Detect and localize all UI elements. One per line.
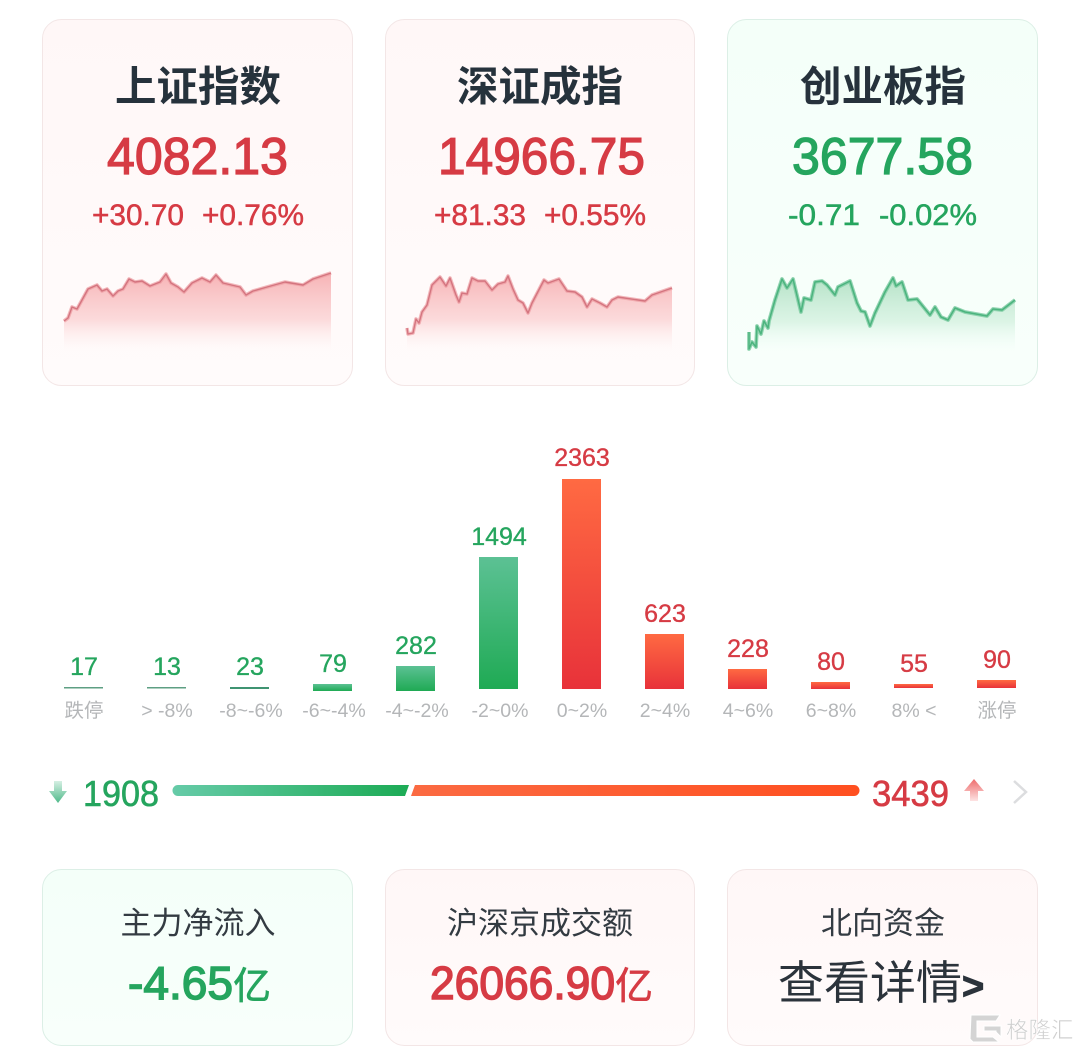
- bar values: 90: [983, 646, 1011, 674]
- panel: 北向资金: [728, 870, 1038, 1046]
- bar labels: -4~-2%: [385, 700, 449, 722]
- heading: 深证成指: 深证成指: [457, 53, 623, 113]
- bar values: 23: [236, 653, 264, 681]
- change: -0.71 -0.02%: -0.71: [788, 199, 860, 232]
- icon: down arrow: [49, 781, 67, 803]
- bar labels: 跌停: [64, 694, 104, 723]
- ratio bar: 跌涨比例: [172, 785, 860, 796]
- bar labels: > -8%: [141, 700, 193, 722]
- value: 3677.58: 3677.58: [792, 128, 973, 186]
- bar values: 17: [70, 653, 98, 681]
- count: 下跌 1908: 1908: [83, 773, 159, 814]
- panel: 深证成指: [386, 20, 694, 386]
- label: 主力净流入: 主力净流入: [120, 898, 276, 943]
- watermark: 格隆汇: [970, 1013, 1074, 1045]
- icon: chevron: [1014, 781, 1026, 803]
- bar labels: 2~4%: [640, 700, 690, 722]
- bar chart: 涨跌分布: [64, 444, 1017, 723]
- change: +81.33 +0.55%: [434, 199, 646, 232]
- bar labels: 4~6%: [723, 700, 773, 722]
- label: 北向资金: 北向资金: [821, 898, 945, 943]
- panel: 沪深京成交额: [386, 870, 694, 1046]
- heading: 上证指数: 上证指数: [115, 53, 281, 113]
- bar values: 623: [644, 600, 686, 628]
- change: -0.71 -0.02%: -0.02%: [879, 199, 977, 232]
- change: -0.71 -0.02%: [788, 199, 977, 232]
- bar labels: -6~-4%: [302, 700, 366, 722]
- change: +81.33 +0.55%: +81.33: [434, 199, 526, 232]
- sparkline: 上证指数: [64, 273, 331, 351]
- falling bars: [64, 557, 518, 691]
- bar values: [70, 444, 1011, 681]
- sparkline: 深证成指: [407, 276, 672, 351]
- bar values: 80: [817, 648, 845, 676]
- rising bars: [562, 479, 1016, 689]
- value: 4082.13: 4082.13: [107, 128, 288, 186]
- bar labels: -2~0%: [472, 700, 528, 722]
- watermark: 格隆汇: 格隆汇: [1006, 1013, 1074, 1045]
- bar labels: -8~-6%: [219, 700, 283, 722]
- link: 查看详情: 查看详情>: [778, 947, 984, 1013]
- panel: 创业板指: [728, 20, 1038, 386]
- bar values: 13: [153, 653, 181, 681]
- bar values: 228: [727, 635, 769, 663]
- change: +81.33 +0.55%: +0.55%: [544, 199, 646, 232]
- bar labels: 6~8%: [806, 700, 856, 722]
- bar labels: [64, 694, 1017, 723]
- bar labels: 0~2%: [557, 700, 607, 722]
- icon: up arrow: [964, 779, 984, 801]
- bar values: 282: [395, 632, 437, 660]
- panel: 主力净流入: [42, 870, 352, 1046]
- bar values: 2363: [554, 444, 610, 472]
- bar values: 79: [319, 650, 347, 678]
- heading: 创业板指: 创业板指: [800, 53, 966, 113]
- bar labels: 8% <: [892, 700, 936, 722]
- change: +30.70 +0.76%: +0.76%: [202, 199, 304, 232]
- change: +30.70 +0.76%: [92, 199, 304, 232]
- bar values: 55: [900, 650, 928, 678]
- change: +30.70 +0.76%: +30.70: [92, 199, 184, 232]
- label: 沪深京成交额: 沪深京成交额: [447, 898, 633, 943]
- value: -4.65亿: -4.65亿: [128, 955, 271, 1010]
- sparkline: 创业板指: [749, 278, 1015, 351]
- count: 上涨 3439: 3439: [872, 773, 949, 814]
- bar values: 1494: [471, 523, 527, 551]
- bar labels: 涨停: [977, 694, 1017, 723]
- value: 26066.90亿: 26066.90亿: [430, 955, 653, 1010]
- value: 14966.75: 14966.75: [438, 128, 645, 186]
- panel: 上证指数: [42, 20, 352, 386]
